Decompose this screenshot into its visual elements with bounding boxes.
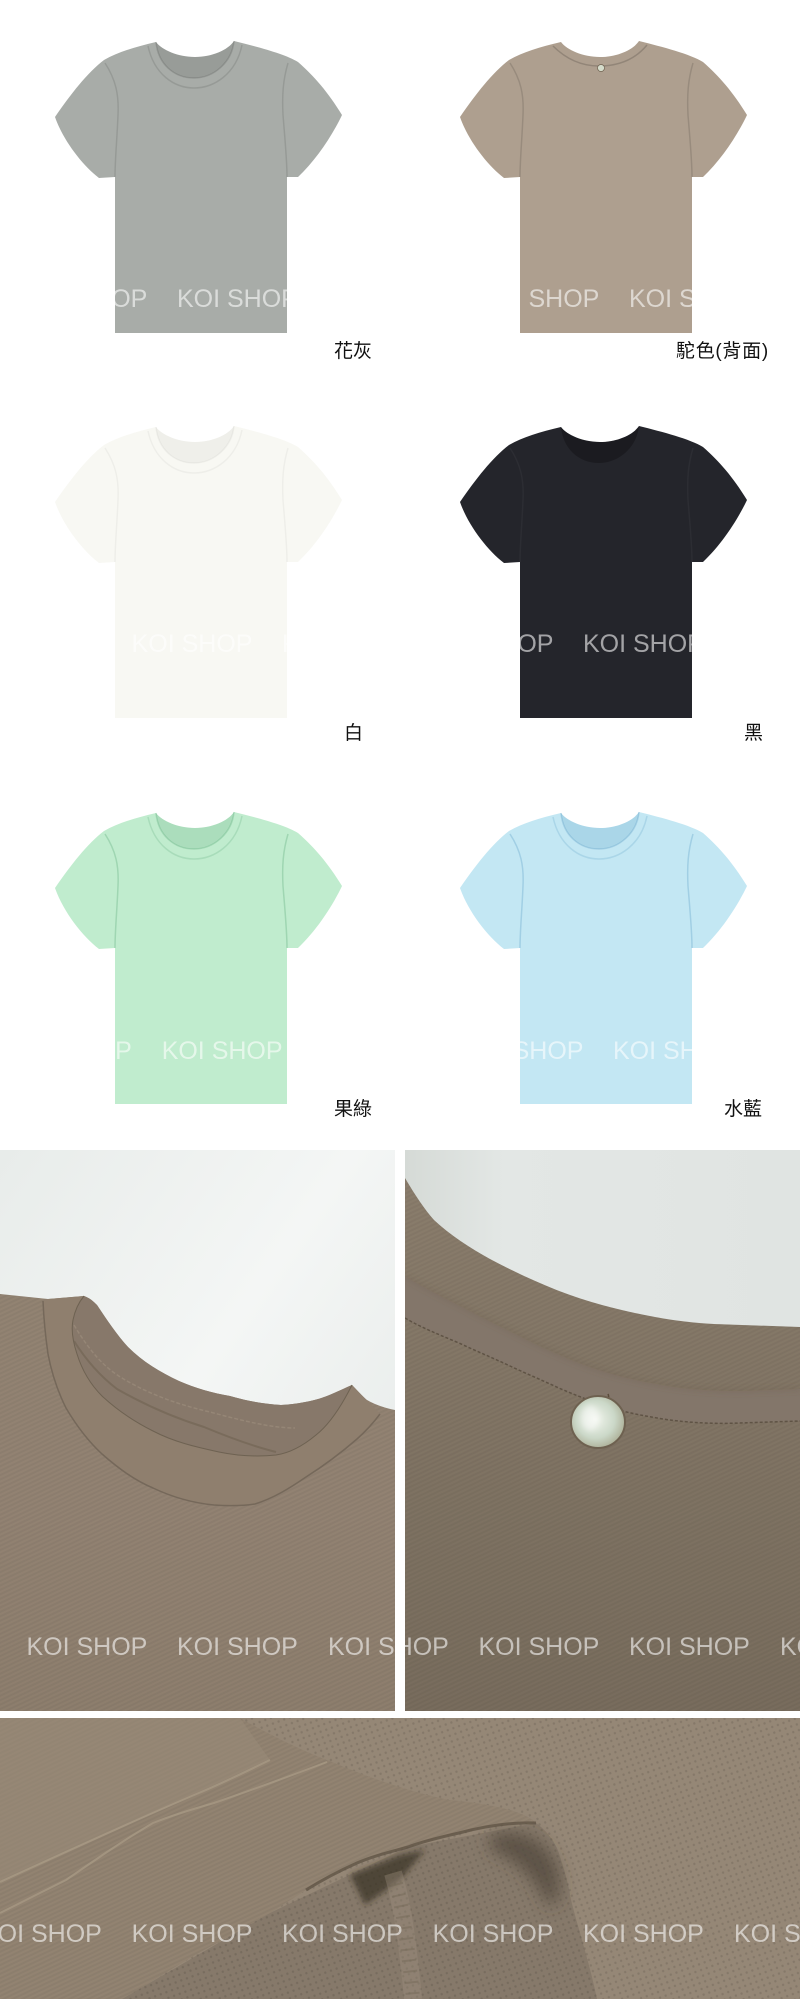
- watermark row 3: KOI SHOP: [312, 1037, 433, 1065]
- watermark row 4: KOI SHOP: [26, 1633, 147, 1661]
- watermark row 3: KOI SHOP: [463, 1037, 583, 1065]
- collar band: [528, 1370, 800, 1423]
- watermark row 5: KOI SHOP: [132, 1920, 252, 1948]
- fold shadow: [490, 1832, 560, 1906]
- watermark row 1: [26, 285, 750, 313]
- label: mint green: 果綠: [334, 1098, 372, 1120]
- label: taupe back: 駝色(背面): [676, 340, 769, 362]
- dark hem edge: [306, 1823, 536, 1890]
- watermark row 5: [0, 1920, 800, 1948]
- watermark row 2: KOI SHOP: [433, 630, 553, 658]
- tee: white: [55, 426, 342, 718]
- label: aqua blue: 水藍: [724, 1098, 762, 1120]
- seam: [393, 1873, 413, 1999]
- tee: black: [460, 426, 747, 718]
- label: heather grey: 花灰: [334, 340, 372, 362]
- watermark row 5: KOI SHOP: [583, 1920, 704, 1948]
- watermark row 5: KOI SHOP: [433, 1920, 553, 1948]
- hem: [0, 1718, 536, 2000]
- inner fold: [122, 1823, 597, 1999]
- watermark row 2: [0, 630, 800, 658]
- watermark row 5: KOI SHOP: [282, 1920, 403, 1948]
- watermark row 3: KOI SHOP: [162, 1037, 283, 1065]
- label: white: 白: [344, 722, 363, 744]
- tee: heather grey: [55, 41, 342, 333]
- watermark row 4: KOI SHOP: [328, 1633, 449, 1661]
- watermark row 2: KOI SHOP: [282, 630, 403, 658]
- photo: collar detail: [0, 1150, 395, 1711]
- photo: pendant detail: [405, 1150, 800, 1711]
- watermark row 1: KOI SHOP: [629, 285, 750, 313]
- watermark row 1: KOI SHOP: [26, 285, 147, 313]
- label: black: 黑: [744, 723, 763, 744]
- watermark row 1: KOI SHOP: [177, 285, 298, 313]
- watermark row 1: KOI SHOP: [478, 285, 599, 313]
- watermark row 4: KOI SHOP: [629, 1633, 750, 1661]
- photo: fabric hem detail: [0, 1718, 800, 2000]
- inner back collar: [72, 1296, 352, 1456]
- tee: mint green: [55, 812, 342, 1104]
- tee: taupe back view: [460, 41, 747, 333]
- watermark row 4: [26, 1633, 800, 1661]
- watermark row 3: KOI SHOP: [11, 1037, 132, 1065]
- gap between photos: [395, 1150, 405, 1711]
- watermark row 4: KOI SHOP: [478, 1633, 599, 1661]
- watermark row 2: KOI SHOP: [583, 630, 704, 658]
- watermark row 2: KOI SHOP: [132, 630, 252, 658]
- watermark row 3: [11, 1037, 734, 1065]
- icon: shell pendant: [571, 1394, 625, 1448]
- tee: aqua blue: [460, 812, 747, 1104]
- watermark row 3: KOI SHOP: [613, 1037, 734, 1065]
- collar band: [48, 1296, 366, 1399]
- icon: shell pendant: [598, 64, 604, 72]
- watermark row 1: KOI SHOP: [328, 285, 449, 313]
- inner neck tape stitching: [74, 1341, 276, 1452]
- watermark row 4: KOI SHOP: [177, 1633, 298, 1661]
